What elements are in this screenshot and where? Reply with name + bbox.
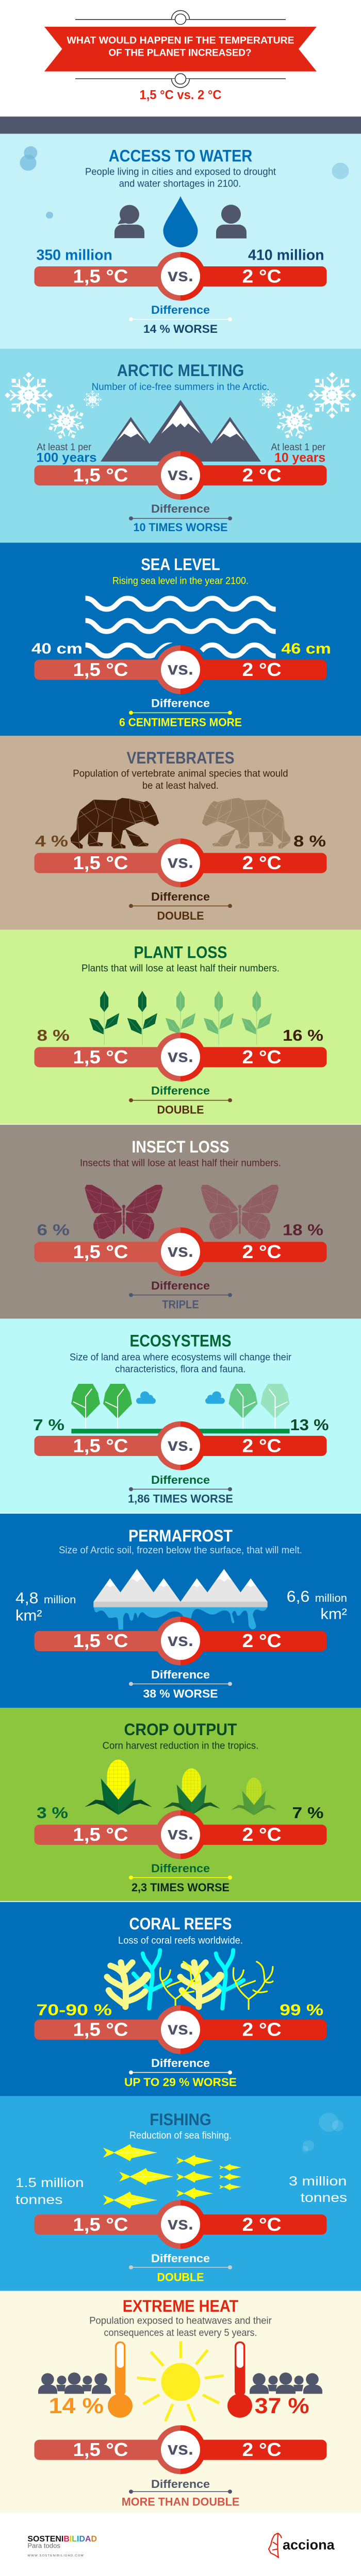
value: 1,5 degrees: tonnes (15, 2193, 63, 2207)
description (85, 166, 276, 189)
comparison bar: 1,5 °C (73, 1435, 128, 1456)
comparison bar: 1,5 °C (73, 2019, 128, 2040)
description: consequences at least every 5 years. (104, 2327, 257, 2338)
comparison bar: 2 °C (242, 1824, 282, 1845)
value: 2 degrees (271, 442, 325, 465)
difference: DOUBLE (157, 909, 204, 922)
description: Population of vertebrate animal species that would (73, 768, 288, 779)
comparison bar: 2 °C (242, 2214, 282, 2235)
subtitle: 1,5 °C vs. 2 °C (140, 88, 222, 102)
logo: sostenibilidad (27, 2535, 97, 2557)
comparison bar (34, 642, 327, 698)
difference: 2,3 TIMES WORSE (132, 1881, 229, 1894)
panel: permafrost (0, 1513, 361, 1708)
description: Reduction of sea fishing. (129, 2130, 232, 2141)
comparison bar (34, 1617, 327, 1666)
logo: acciona (269, 2533, 335, 2558)
value: 2 degrees: 13 % (290, 1415, 329, 1434)
value: 2 degrees: At least 1 per (271, 442, 325, 453)
panel: extreme heat (0, 2291, 361, 2513)
comparison bar: 2 °C (242, 659, 282, 680)
value: 2 degrees: 99 % (280, 2001, 323, 2019)
heading: SEA LEVEL (141, 555, 220, 573)
difference: Difference (151, 2252, 210, 2265)
panel: insect loss (0, 1124, 361, 1319)
difference: Difference (151, 2057, 210, 2070)
logo: sostenibilidad: WWW.SOSTENIBILIDAD.COM (27, 2554, 83, 2557)
comparison bar (34, 2425, 327, 2474)
icon: person left (114, 205, 144, 238)
comparison bar: 1,5 °C (73, 1824, 128, 1845)
value: 2 degrees: 37 % (255, 2394, 309, 2418)
value: 2 degrees (289, 2174, 347, 2205)
comparison bar: 1,5 °C (73, 1241, 128, 1262)
icon: mountains (101, 400, 261, 462)
description: Corn harvest reduction in the tropics. (103, 1740, 258, 1751)
heading: CROP OUTPUT (124, 1721, 237, 1739)
difference: Difference (151, 1669, 210, 1681)
heading: PERMAFROST (128, 1527, 233, 1545)
icon: thermometer orange (108, 2342, 133, 2418)
icon: crowd right (250, 2372, 322, 2394)
icon: corn (85, 1759, 277, 1815)
comparison bar (34, 451, 327, 500)
panel: ecosystems (0, 1319, 361, 1513)
description: Insects that will lose at least half their numbers. (80, 1158, 281, 1168)
comparison bar: vs. (168, 2019, 193, 2039)
comparison bar (34, 2005, 327, 2054)
difference: 1,86 TIMES WORSE (128, 1493, 233, 1505)
difference (119, 697, 242, 728)
difference: 14 % WORSE (143, 323, 218, 335)
description: Size of land area where ecosystems will change their (70, 1352, 291, 1363)
value: 1,5 degrees: 40 cm (31, 640, 83, 657)
comparison bar: vs. (168, 658, 193, 679)
comparison bar: 2 °C (242, 266, 282, 286)
difference (129, 1084, 232, 1116)
difference: Difference (151, 1279, 210, 1292)
description (89, 2315, 272, 2338)
ornament: top line with rings (75, 10, 286, 24)
comparison bar: 2 °C (242, 853, 282, 873)
value: 1,5 degrees: 8 % (37, 1026, 70, 1044)
heading: ARCTIC MELTING (117, 362, 244, 380)
heading: PLANT LOSS (134, 943, 227, 961)
description: Plants that will lose at least half their numbers. (81, 963, 280, 974)
panel: vertebrates (0, 736, 361, 930)
panel: access to water (0, 134, 361, 349)
ground (71, 1429, 290, 1433)
difference: Difference (151, 502, 210, 515)
comparison bar: 2 °C (242, 465, 282, 485)
bubbles (302, 2113, 343, 2152)
comparison bar: vs. (168, 464, 193, 484)
comparison bar: 2 °C (242, 1241, 282, 1262)
description (70, 1352, 291, 1375)
comparison bar: vs. (168, 1823, 193, 1844)
comparison bar: 2 °C (242, 2019, 282, 2040)
dark band (0, 116, 361, 134)
comparison bar: 2 °C (242, 1631, 282, 1651)
heading: INSECT LOSS (132, 1138, 229, 1156)
comparison bar: 1,5 °C (73, 266, 128, 286)
icon: trees (71, 1384, 290, 1429)
difference (129, 2252, 232, 2284)
icon: melting permafrost (93, 1569, 268, 1630)
heading: FISHING (150, 2110, 211, 2129)
icon: dark bear (71, 798, 159, 849)
heading: ECOSYSTEMS (130, 1332, 232, 1350)
logo: sostenibilidad: SOSTENIBILIDAD (27, 2535, 97, 2544)
panel: coral reefs (0, 1901, 361, 2096)
value: 1,5 degrees: 4,8 (15, 1588, 38, 1607)
description: and water shortages in 2100. (119, 178, 241, 189)
difference (129, 1279, 232, 1311)
comparison bar: 1,5 °C (73, 1046, 128, 1067)
icon: crowd left (38, 2372, 111, 2394)
value: 1,5 degrees (37, 442, 97, 465)
value: 2 degrees: 8 % (293, 832, 326, 850)
icon: thermometer red (227, 2342, 252, 2418)
title ribbon: OF THE PLANET INCREASED? (109, 47, 252, 58)
comparison bar: 2 °C (242, 1435, 282, 1456)
difference: TRIPLE (162, 1298, 199, 1311)
ornament: bottom line with rings (75, 74, 286, 88)
difference (128, 1473, 233, 1505)
comparison bar (34, 252, 327, 301)
difference (129, 303, 232, 335)
difference: Difference (151, 697, 210, 709)
comparison bar: 1,5 °C (73, 1631, 128, 1651)
value: 1,5 degrees (15, 2176, 84, 2207)
description: People living in cities and exposed to drought (85, 166, 276, 178)
icon: dark butterfly (85, 1185, 163, 1239)
value: 1,5 degrees: 70-90 % (36, 2001, 112, 2019)
comparison bar: 2 °C (242, 2439, 282, 2460)
value: 2 degrees: 410 million (248, 247, 324, 263)
value: 2 degrees: 18 % (283, 1221, 323, 1239)
value: 1,5 degrees (15, 1588, 76, 1624)
comparison bar: 1,5 °C (73, 853, 128, 873)
heading: CORAL REEFS (129, 1915, 232, 1933)
icon: corals (107, 1950, 273, 2009)
difference (129, 1669, 232, 1700)
comparison bar (34, 1810, 327, 1859)
value: 1,5 degrees: 100 years (37, 451, 97, 465)
comparison bar: 1,5 °C (73, 659, 128, 680)
title ribbon (44, 27, 317, 72)
comparison bar: vs. (168, 1434, 193, 1455)
icon: person right (216, 205, 247, 239)
value: 1,5 degrees: 7 % (33, 1415, 64, 1434)
description: Population exposed to heatwaves and their (89, 2315, 272, 2327)
logo: sostenibilidad: Para todos (27, 2542, 60, 2550)
value: 2 degrees: tonnes (301, 2191, 347, 2205)
icon: sun (137, 2342, 224, 2421)
comparison bar: vs. (168, 1630, 193, 1650)
value: 1,5 degrees: At least 1 per (37, 442, 92, 453)
comparison bar: vs. (168, 2438, 193, 2459)
comparison bar (34, 1032, 327, 1081)
value: 2 degrees: km² (320, 1605, 347, 1623)
description (73, 768, 288, 791)
value: 1,5 degrees: million (44, 1593, 76, 1606)
value: 2 degrees: 10 years (274, 451, 325, 465)
value: 2 degrees: 3 million (289, 2174, 347, 2189)
icon: faded bear (202, 798, 290, 849)
footer (27, 2533, 335, 2558)
heading: EXTREME HEAT (123, 2297, 238, 2315)
difference: DOUBLE (157, 2271, 204, 2284)
comparison bar (34, 1227, 327, 1276)
value: 1,5 degrees: 350 million (36, 247, 112, 263)
difference: Difference (151, 890, 210, 903)
value: 2 degrees (287, 1587, 347, 1623)
description: be at least halved. (142, 780, 219, 791)
difference (129, 1862, 232, 1894)
icon: faded butterfly (201, 1185, 279, 1239)
comparison bar: 1,5 °C (73, 465, 128, 485)
comparison bar (34, 2200, 327, 2249)
bubbles (20, 146, 349, 218)
panel: fishing (0, 2096, 361, 2291)
difference: Difference (151, 2478, 210, 2490)
difference: Difference (151, 1862, 210, 1875)
difference: UP TO 29 % WORSE (124, 2076, 237, 2089)
value: 1,5 degrees: 14 % (49, 2394, 104, 2418)
comparison bar: vs. (168, 2213, 193, 2233)
value: 2 degrees: 16 % (283, 1026, 323, 1044)
panel: sea level (0, 543, 361, 736)
comparison bar: vs. (168, 265, 193, 285)
comparison bar: 1,5 °C (73, 2439, 128, 2460)
difference: Difference (151, 1084, 210, 1097)
value: 2 degrees: 46 cm (281, 640, 331, 657)
description: characteristics, flora and fauna. (115, 1364, 246, 1375)
description: Rising sea level in the year 2100. (112, 575, 249, 587)
comparison bar: vs. (168, 852, 193, 872)
difference (124, 2057, 237, 2089)
icon: clouds (136, 1392, 225, 1404)
header (44, 10, 317, 102)
value: 1,5 degrees: km² (15, 1607, 42, 1624)
value: 1,5 degrees: 6 % (37, 1221, 70, 1239)
icon: plants (89, 991, 272, 1045)
value: 1,5 degrees: 1.5 million (15, 2176, 84, 2190)
panel: plant loss (0, 930, 361, 1124)
icon: fish (103, 2144, 241, 2209)
heading: VERTEBRATES (127, 749, 235, 767)
title ribbon: WHAT WOULD HAPPEN IF THE TEMPERATURE (67, 35, 294, 46)
value: 1,5 degrees: 4 % (35, 832, 68, 850)
difference: 38 % WORSE (143, 1687, 218, 1700)
icon: snowflakes (5, 372, 356, 445)
difference: MORE THAN DOUBLE (122, 2496, 239, 2508)
comparison bar: 1,5 °C (73, 2214, 128, 2235)
value: 2 degrees: 6,6 (287, 1587, 309, 1605)
value: 1,5 degrees: 3 % (37, 1804, 68, 1822)
comparison bar (34, 838, 327, 887)
value: 2 degrees: million (315, 1591, 347, 1604)
comparison bar: vs. (168, 1046, 193, 1066)
comparison bar (34, 1421, 327, 1470)
logo: acciona: acciona (283, 2537, 335, 2552)
description: Size of Arctic soil, frozen below the surface, that will melt. (59, 1545, 302, 1556)
comparison bar: vs. (168, 1241, 193, 1261)
description: Number of ice-free summers in the Arctic. (92, 381, 269, 393)
icon: water drop (163, 196, 198, 247)
comparison bar: 2 °C (242, 1046, 282, 1067)
icon: waves (86, 598, 276, 656)
difference (129, 890, 232, 922)
difference: 6 CENTIMETERS MORE (119, 716, 242, 728)
difference: 10 TIMES WORSE (133, 521, 228, 534)
difference (129, 502, 232, 534)
description: Loss of coral reefs worldwide. (118, 1935, 243, 1946)
value: 2 degrees: 7 % (292, 1804, 324, 1822)
difference: Difference (151, 303, 210, 316)
heading: ACCESS TO WATER (109, 147, 252, 165)
panel: crop output (0, 1708, 361, 1902)
difference: DOUBLE (157, 1104, 204, 1116)
difference (122, 2478, 239, 2508)
difference: Difference (151, 1473, 210, 1486)
panel: arctic melting (0, 349, 361, 543)
